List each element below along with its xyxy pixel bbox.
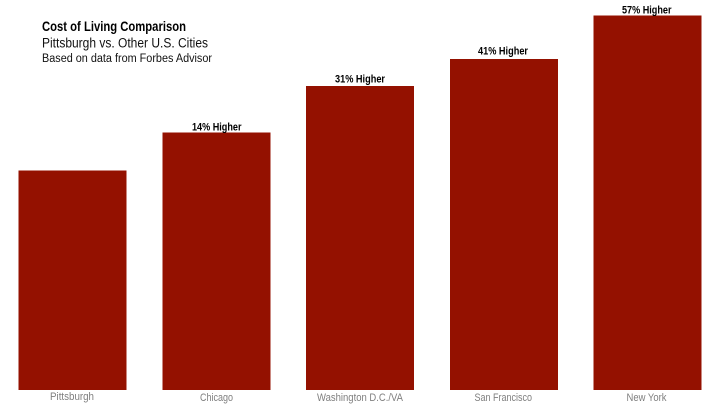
bar group: New York — [594, 4, 702, 404]
bar: New York — [594, 16, 702, 390]
title block — [42, 19, 212, 65]
bar group: Chicago — [162, 122, 270, 404]
bar: Washington D.C./VA — [306, 86, 414, 390]
bar group: San Francisco — [450, 46, 558, 404]
axis label: Pittsburgh: Pittsburgh — [50, 391, 94, 403]
value label: New York: 57% Higher — [622, 4, 672, 16]
value label: Chicago: 14% Higher — [192, 122, 242, 134]
value label: Washington D.C./VA: 31% Higher — [335, 74, 386, 86]
axis label: Chicago: Chicago — [200, 392, 233, 404]
bar group: Pittsburgh — [18, 170, 126, 403]
value label: San Francisco: 41% Higher — [478, 46, 529, 58]
axis label: San Francisco: San Francisco — [474, 392, 532, 404]
bar: San Francisco — [450, 59, 558, 390]
title: Cost of Living Comparison — [42, 19, 186, 34]
source note: Based on data from Forbes Advisor — [42, 53, 212, 65]
bar group: Washington D.C./VA — [306, 74, 414, 404]
subtitle: Pittsburgh vs. Other U.S. Cities — [42, 36, 208, 50]
axis label: New York: New York — [626, 392, 667, 404]
axis label: Washington D.C./VA: Washington D.C./VA — [317, 392, 404, 404]
bar: Pittsburgh — [18, 170, 126, 390]
bar: Chicago — [162, 132, 270, 390]
